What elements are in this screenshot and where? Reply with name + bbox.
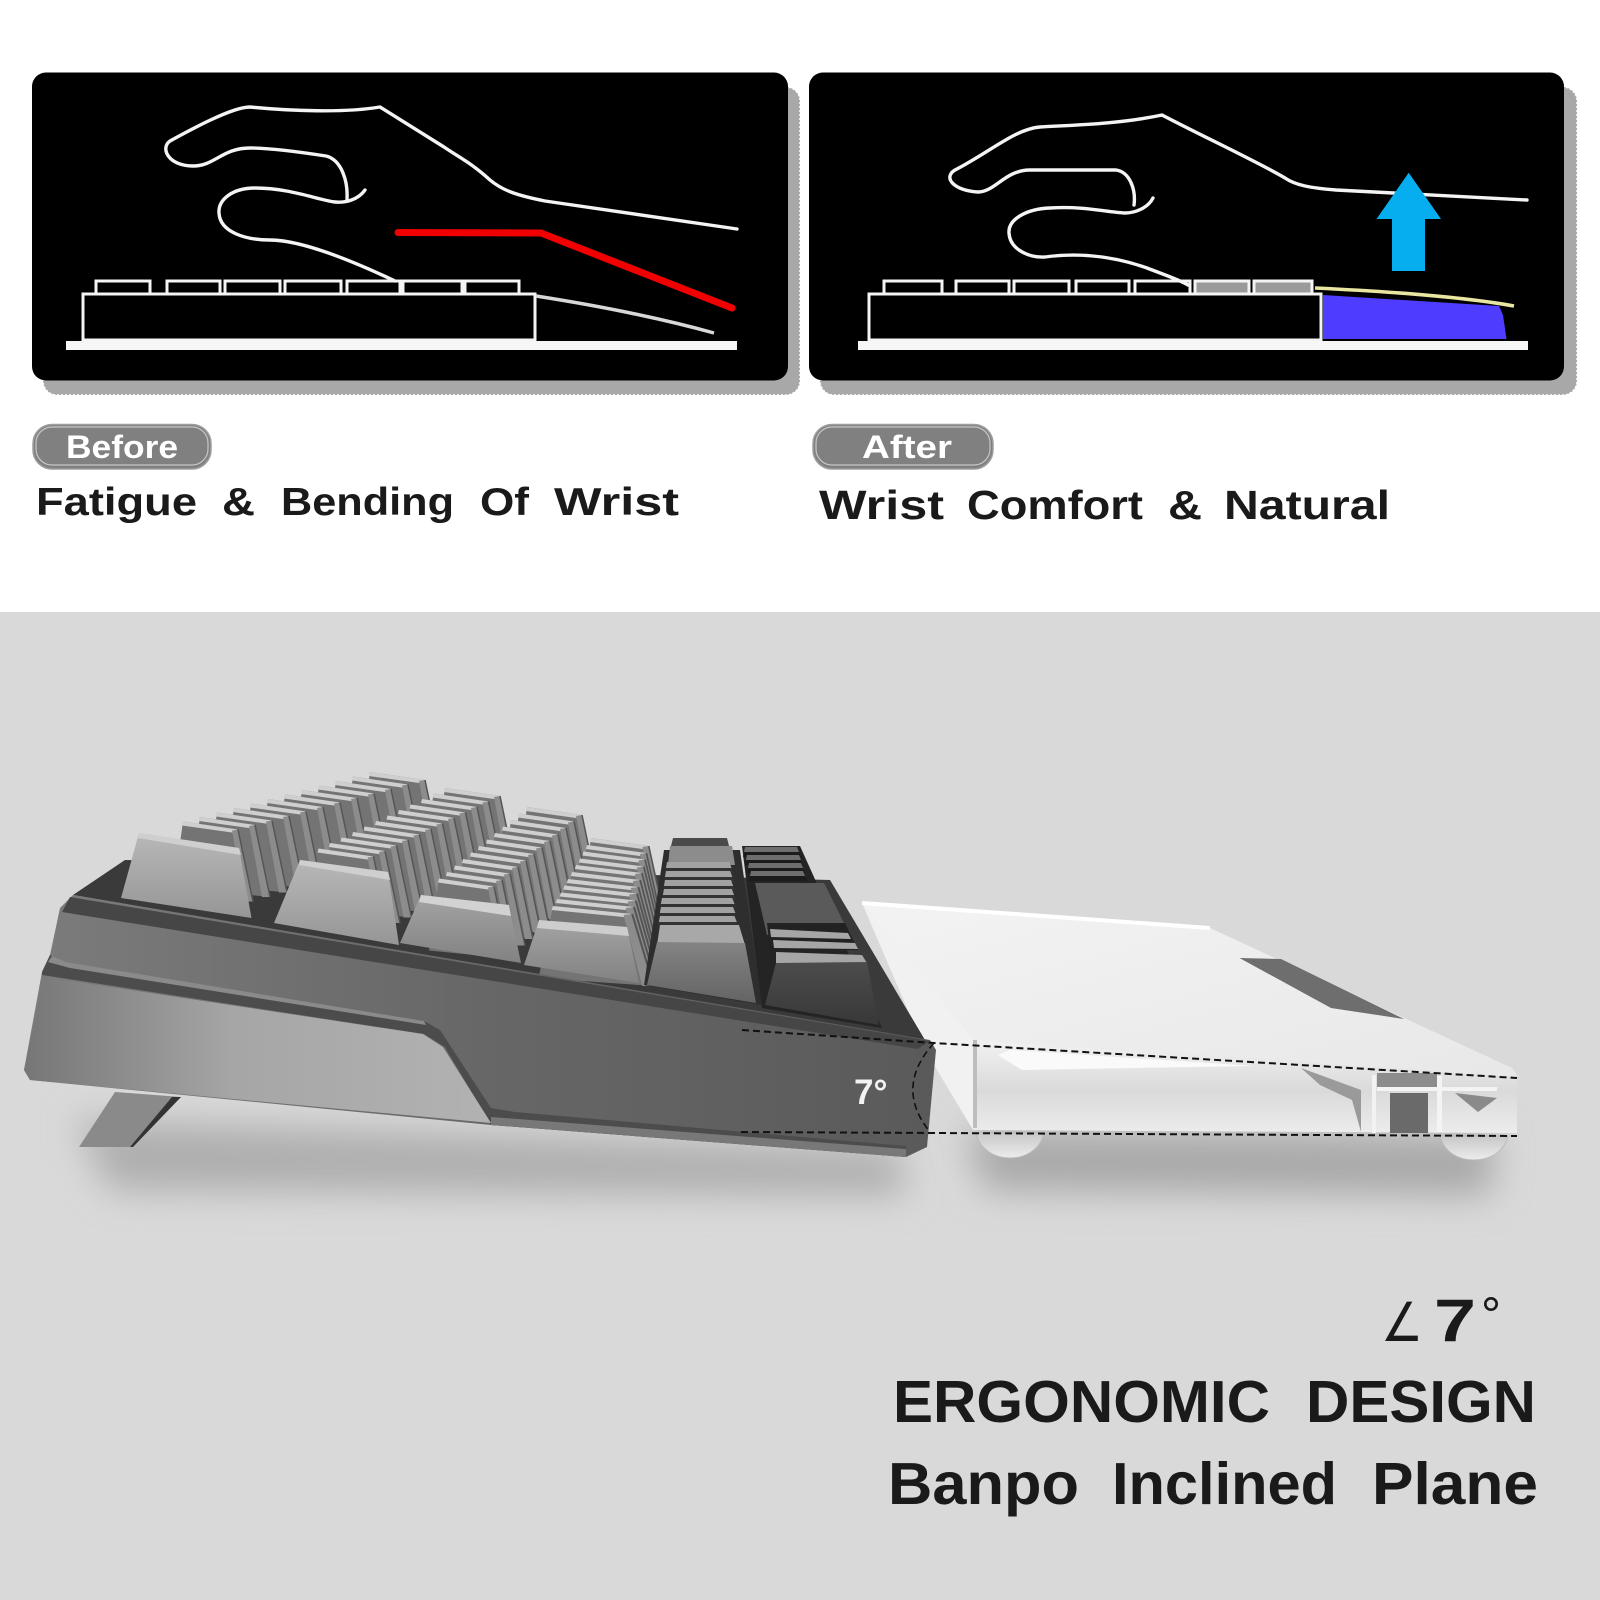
heading: before: Fatigue: [36, 481, 197, 524]
heading: after: Natural: [1224, 482, 1390, 528]
keyboard: [24, 772, 936, 1157]
wrist rest: [862, 903, 1517, 1160]
angle mark: ∠: [1381, 1291, 1423, 1354]
rubber foot right: [1440, 1136, 1508, 1160]
keyboard outline: [83, 281, 535, 340]
key row 1: [121, 772, 440, 918]
rubber foot left: [976, 1133, 1044, 1158]
badge: Before: Before: [66, 429, 178, 465]
hand outline: bent wrist: [166, 107, 737, 281]
grey lower section: [0, 612, 1600, 1600]
key row 2: [274, 788, 515, 945]
badge: After: [813, 424, 993, 469]
heading: before: Bending: [281, 481, 454, 524]
subtitle: Inclined: [1112, 1451, 1337, 1517]
heading: after: [819, 482, 1390, 528]
angle mark: 7: [1434, 1287, 1476, 1354]
bottom dashed line: [741, 1132, 1517, 1136]
front edge highlight: [998, 1050, 1255, 1070]
heading: after: Comfort: [967, 482, 1143, 528]
wrist rest rim highlight: [862, 903, 1210, 928]
heading: after: &: [1168, 482, 1202, 528]
wrist rest front face: [973, 1040, 1517, 1133]
heading: before: [36, 481, 679, 524]
case side: [24, 895, 936, 1157]
wrist rest logo plate: [1240, 958, 1404, 1019]
title: DESIGN: [1306, 1369, 1536, 1435]
top dashed line: [742, 1030, 1517, 1078]
heading: after: Wrist: [819, 482, 944, 528]
keyboard outline: [869, 281, 1321, 340]
groove highlight: [48, 956, 426, 1025]
top plate: [73, 860, 925, 1040]
seam groove: [42, 955, 906, 1157]
hand outline: level wrist: [950, 115, 1527, 285]
heading: before: &: [222, 481, 255, 524]
angle mark: °: [1481, 1287, 1501, 1343]
badge: Before: [33, 424, 211, 469]
title: [893, 1369, 1536, 1435]
badge: After: After: [862, 429, 952, 465]
grey pressed keys: [1195, 281, 1312, 294]
acrylic refraction details: [973, 1040, 1497, 1133]
key row 6: [742, 846, 882, 1028]
key row 4: [524, 838, 664, 986]
blue wrist rest: [1323, 295, 1506, 339]
7 degree angle guide: [741, 1030, 1517, 1136]
red wrist angle line: [398, 232, 732, 308]
heading: before: Of: [480, 481, 530, 524]
key row 3: [400, 807, 597, 963]
key row 5: [644, 838, 762, 1005]
subtitle: Plane: [1372, 1451, 1538, 1517]
title: ERGONOMIC: [893, 1369, 1270, 1435]
blue up arrow: [1376, 173, 1441, 271]
keyboard floor shadow: [75, 1120, 905, 1195]
panel: after diagram: [809, 72, 1577, 395]
wrist rest floor shadow: [965, 1130, 1495, 1195]
wrist rest top line: [1315, 288, 1514, 306]
angle mark: [1381, 1287, 1501, 1354]
subtitle: [888, 1451, 1538, 1517]
desk base: [858, 341, 1528, 350]
label: 7 degrees on keyboard: 7°: [854, 1073, 887, 1112]
subtitle: Banpo: [888, 1451, 1079, 1517]
silver side panel: [24, 977, 491, 1123]
dashed arc: [913, 1043, 934, 1132]
desk base: [66, 341, 737, 350]
wrist rest left face: [862, 903, 973, 1130]
stand leg: [79, 1092, 181, 1147]
heading: before: Wrist: [554, 481, 679, 524]
sloped palm line: [536, 296, 714, 333]
lower bar highlight: [491, 1117, 906, 1157]
top dark band: [62, 897, 930, 1049]
panel: before diagram: [32, 72, 800, 395]
wrist rest top surface: [862, 903, 1517, 1077]
